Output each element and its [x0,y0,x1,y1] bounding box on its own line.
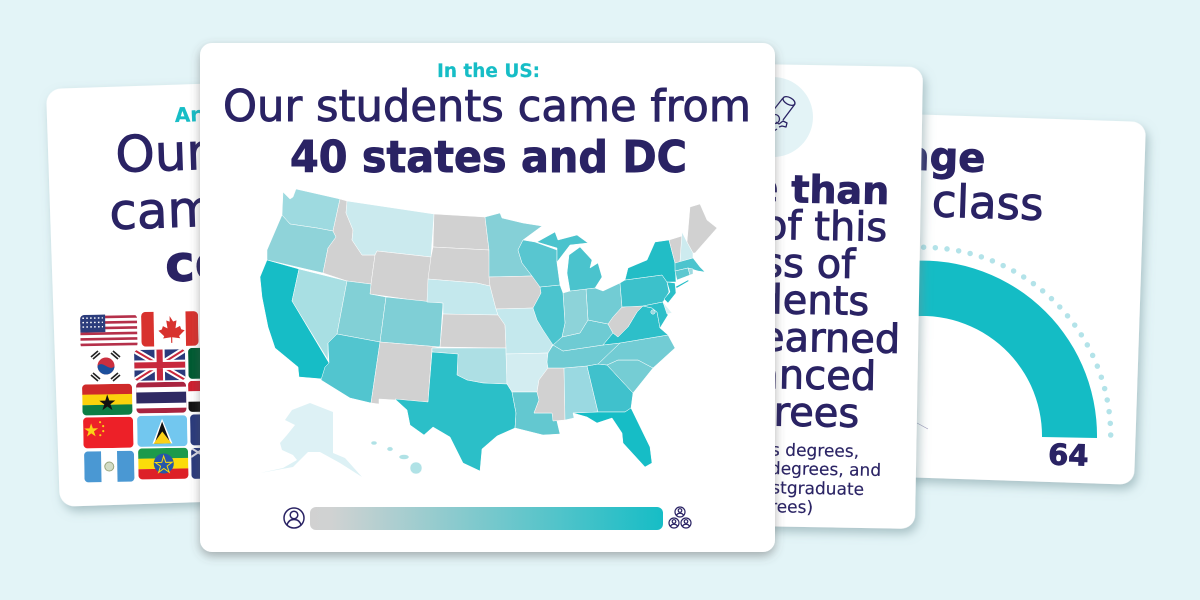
gauge value: 64 [1048,437,1089,473]
state: NJ [664,282,676,303]
gauge arc [900,261,1097,438]
state: ID [323,199,375,284]
icon: group of people [669,507,691,528]
state: NY [625,240,676,282]
card heading: advanced [680,351,877,400]
main heading: Our students came from [223,81,751,132]
card footnote: (master's degrees, [700,439,859,462]
choropleth map of US states [260,189,717,477]
flag: Ghana [82,384,133,416]
state: MD [643,302,668,328]
card heading: More than [679,164,890,214]
state: MO [496,308,553,354]
state: UT [337,281,386,342]
gauge chart [900,247,1111,473]
state: CO [380,297,443,347]
state: AR [506,353,548,392]
flag: green [188,348,200,379]
card heading: countries [164,227,430,293]
icon: single person [284,508,304,528]
card heading [106,115,445,295]
card heading: have earned [649,313,901,363]
panel: international students card [44,84,200,516]
state: OH [586,283,622,324]
flag: tricolour [188,380,200,412]
state: FL [573,408,652,467]
legend [284,507,691,530]
state: NE [427,279,498,315]
state: MA [675,258,705,272]
card heading: Our students [114,115,441,184]
card subtitle: Around the world: [174,96,379,127]
state: LA [512,392,560,435]
panel: advanced degrees card [515,60,923,529]
card heading [757,130,1044,231]
icon: diploma in circle [733,77,813,157]
flag: Thailand [136,382,187,413]
card heading: half of this [675,201,888,251]
state: NC [598,335,675,368]
flag: Saint Lucia [137,415,188,447]
state: WI [518,240,560,287]
state: WY [370,251,431,302]
state: NM [371,342,440,404]
state: NV [292,269,347,360]
state: SC [607,360,653,393]
state: IN [562,289,588,337]
state: WA [282,189,340,231]
state: ME [687,204,717,253]
flag: New Zealand-style [191,448,200,479]
state: MI lower [567,247,602,291]
state: MI upper [537,232,588,262]
card heading: came from [108,174,380,241]
legend gradient bar [310,507,663,530]
card footnote: postgraduate [750,478,864,500]
state: TN [547,343,620,368]
flag: China [83,417,134,448]
card heading: of the class [757,169,1044,231]
main heading [223,81,751,183]
flag: USA [80,314,138,349]
state: AZ [321,334,380,403]
gauge needle trace [917,423,928,429]
card heading: degrees [698,388,860,437]
state: SD [428,247,490,286]
flag: Canada [141,311,199,347]
state: ND [433,214,489,250]
state: AL [564,366,598,420]
state: VT [669,236,682,263]
state: VA [603,306,668,345]
card footnote: doctoral degrees, and [695,458,881,481]
state: HI [371,441,422,474]
state: GA [587,364,633,412]
card footnote: degrees) [738,497,813,518]
state: OR [267,215,336,273]
state: WV [608,305,643,337]
flag: United Kingdom [134,349,186,381]
state: RI [688,268,693,275]
state: DE [663,302,672,314]
flag: navy [190,414,200,446]
card heading: Average [800,130,986,182]
gauge dots [905,247,1111,435]
state: CT [675,268,690,280]
flag: South Korea [91,351,120,381]
state: NH [680,232,693,262]
state: IA [489,276,541,309]
state: IL [533,285,565,345]
card heading: students [695,276,870,325]
state: DC [651,310,655,314]
state: CA [260,260,329,379]
state: PA [620,275,669,307]
flag: Ethiopia [138,448,189,480]
state: OK [432,348,507,384]
panel: average age card [734,109,1146,485]
state: KY [553,320,613,351]
card heading: class of [704,239,857,288]
state: AK [260,403,362,477]
state: MS [534,368,565,421]
state: MT [346,201,434,257]
state: Long Island [675,280,689,288]
panel: US states main card [200,43,775,552]
state: KS [440,314,506,348]
flag grid [80,311,200,482]
state: MN [485,213,542,277]
card footnote [695,439,881,518]
main heading: 40 states and DC [290,132,687,183]
card heading [649,164,901,437]
card subtitle: In the US: [437,61,540,82]
state: TX [395,352,516,471]
flag: Guatemala [84,451,135,482]
